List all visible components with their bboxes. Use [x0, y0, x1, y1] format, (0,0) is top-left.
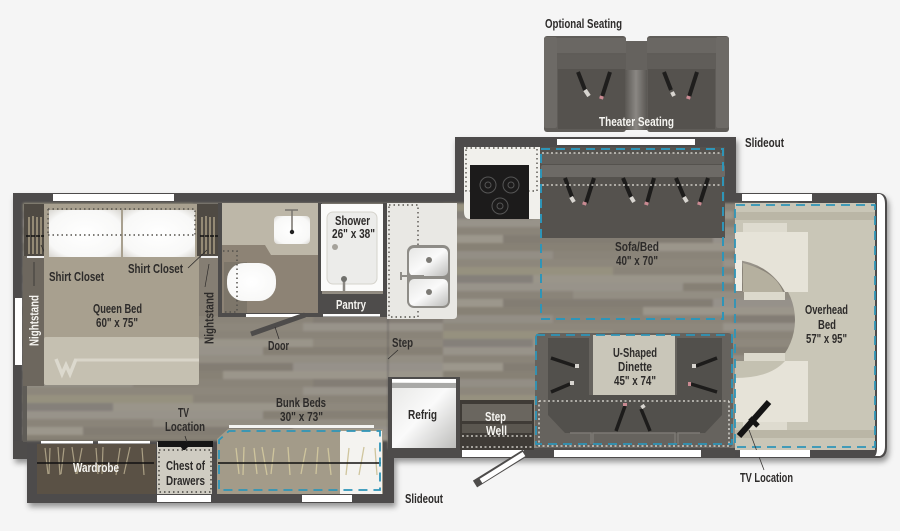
label: theater seating: Theater Seating	[599, 114, 674, 129]
left side strip	[23, 256, 44, 386]
entry door	[475, 453, 525, 484]
cooktop area	[464, 147, 540, 219]
lower wall right of slideout	[388, 448, 735, 458]
label: pantry: Pantry	[336, 297, 367, 312]
main coach body with floor walls	[13, 137, 887, 503]
window: step well	[462, 450, 524, 457]
kitchen counter with sink	[387, 203, 457, 319]
label: nightstand left: Nightstand	[26, 295, 42, 346]
window: dinette	[554, 450, 701, 457]
label: shower size: 26" x 38"	[332, 226, 375, 241]
sofa bed blue dashed outline	[541, 149, 723, 319]
shower	[321, 204, 383, 291]
wood floor	[23, 203, 388, 441]
label: nightstand right: Nightstand	[202, 292, 216, 344]
label: step: Step	[392, 335, 413, 350]
nightstand left leader	[33, 262, 35, 286]
label: step well step: Step	[485, 409, 506, 424]
sofa bed	[540, 147, 725, 238]
TV bar	[158, 436, 213, 450]
label: shirt closet left: Shirt Closet	[49, 269, 104, 284]
label: tv location right: TV Location	[740, 470, 793, 485]
optional theater seating	[544, 36, 729, 132]
label: queen bed: Queen Bed	[93, 301, 142, 316]
left inner wall line	[23, 385, 27, 442]
label: optional seating: Optional Seating	[545, 16, 622, 31]
walls around shower and pantry	[383, 203, 387, 317]
label: drawers: Drawers	[166, 473, 205, 488]
label: slideout top: Slideout	[745, 135, 785, 150]
door leader	[275, 327, 279, 339]
U-shaped dinette	[535, 333, 733, 448]
dinette table	[593, 335, 675, 395]
nose cap	[875, 194, 885, 456]
TV on overhead bed	[739, 402, 769, 470]
step well	[460, 400, 534, 450]
label: shower: Shower	[335, 213, 370, 228]
window: top right	[742, 194, 812, 201]
nightstand right leader	[205, 264, 209, 287]
chest of drawers	[157, 442, 212, 494]
nightstand right	[199, 258, 218, 316]
label: dinette: Dinette	[618, 359, 652, 374]
window: bunk	[302, 495, 352, 502]
label: sofa bed size: 40" x 70"	[616, 253, 658, 268]
door to bathroom	[251, 315, 305, 334]
label: door: Door	[268, 338, 289, 353]
label: bed: Bed	[818, 317, 836, 332]
bathroom	[218, 203, 322, 317]
window: slideout top	[557, 139, 695, 145]
window: rear	[15, 298, 22, 365]
label: tv: TV	[178, 405, 189, 420]
floor beneath slideout and overhead	[388, 203, 798, 449]
label: u-shaped: U-Shaped	[613, 345, 657, 360]
label: slideout bottom: Slideout	[405, 491, 443, 506]
label: refrig: Refrig	[408, 407, 437, 422]
refrigerator	[388, 377, 460, 450]
window: top left	[53, 194, 174, 201]
label: dinette size: 45" x 74"	[614, 373, 656, 388]
label: wardrobe: Wardrobe	[73, 460, 119, 475]
pillows	[49, 210, 195, 257]
label: overhead: Overhead	[805, 302, 848, 317]
label: bunk size: 30" x 73"	[280, 409, 323, 424]
shirt closet left	[24, 204, 52, 268]
label: location: Location	[165, 419, 205, 434]
window: lower right	[740, 450, 810, 457]
label: queen bed size: 60" x 75"	[96, 315, 138, 330]
label: bunk beds: Bunk Beds	[276, 395, 326, 410]
label: overhead size: 57" x 95"	[806, 331, 847, 346]
sink basins	[401, 245, 450, 308]
toilet	[223, 251, 276, 313]
step leader	[388, 350, 398, 359]
overhead bed	[735, 203, 875, 450]
label: sofa bed: Sofa/Bed	[615, 239, 659, 254]
left lower wall	[13, 441, 27, 459]
sink	[274, 210, 310, 244]
label: step well well: Well	[486, 423, 507, 438]
bunk beds	[217, 425, 383, 494]
window: chest	[157, 495, 211, 502]
label: shirt closet right: Shirt Closet	[128, 261, 183, 276]
pantry	[321, 294, 383, 317]
wardrobe	[37, 441, 156, 494]
label: chest of: Chest of	[166, 458, 206, 473]
queen bed	[44, 204, 199, 385]
shirt closet right	[188, 204, 219, 268]
